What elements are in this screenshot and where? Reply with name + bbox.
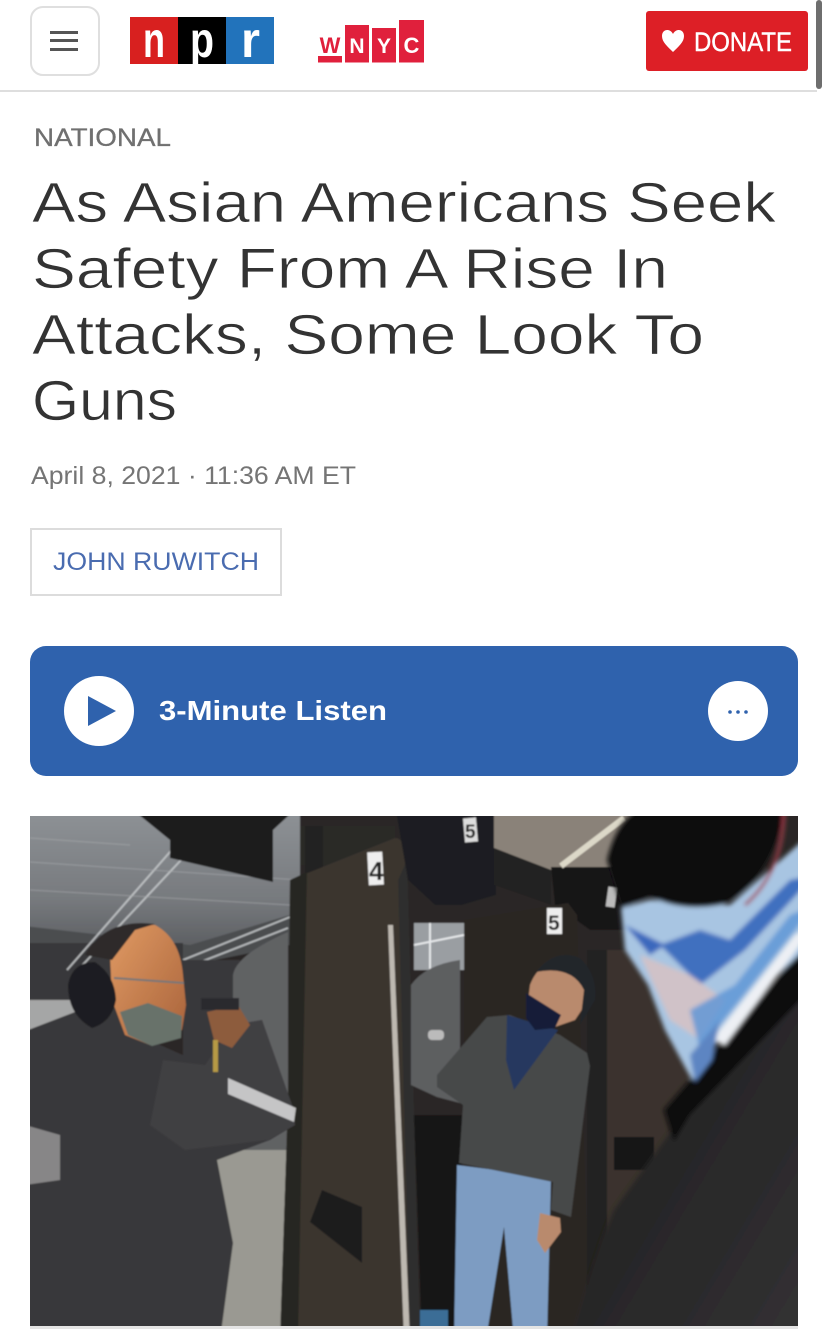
menu button bbox=[31, 7, 99, 75]
WNYC logo: W bbox=[320, 33, 341, 58]
ceiling right bbox=[492, 816, 635, 871]
donate button bbox=[646, 11, 808, 71]
WNYC logo bbox=[318, 20, 424, 62]
scrollbar bbox=[816, 0, 822, 89]
floor bbox=[215, 1150, 292, 1331]
icon: heart bbox=[662, 30, 684, 52]
headline: Safety From A Rise In bbox=[32, 237, 668, 301]
photo: shooting range bbox=[15, 800, 815, 1331]
ceiling bbox=[30, 816, 302, 946]
listen label: 3-Minute Listen bbox=[159, 695, 387, 726]
headline bbox=[32, 171, 777, 433]
headline: Guns bbox=[32, 369, 177, 433]
photo bottom edge bbox=[30, 1326, 798, 1329]
WNYC logo: C bbox=[404, 33, 420, 58]
middle panel bbox=[411, 960, 460, 1103]
WNYC logo: Y bbox=[377, 35, 391, 58]
back wall bbox=[182, 959, 240, 1064]
side wall panel bbox=[233, 932, 288, 1160]
audio player bbox=[30, 646, 798, 776]
foreground person bbox=[604, 816, 798, 1326]
section label: NATIONAL bbox=[34, 124, 171, 152]
headline: As Asian Americans Seek bbox=[32, 171, 777, 235]
byline button bbox=[31, 529, 281, 595]
photo: shooting range: 5 bbox=[465, 822, 476, 843]
date line: April 8, 2021 · 11:36 AM ET bbox=[31, 462, 356, 490]
donate button: DONATE bbox=[694, 27, 792, 57]
navigation bar bbox=[0, 0, 828, 92]
upper right screen bbox=[398, 816, 496, 904]
NPR logo: r bbox=[241, 12, 260, 68]
NPR logo bbox=[130, 12, 274, 68]
icon: play button bbox=[64, 676, 134, 746]
NPR logo: p bbox=[190, 12, 214, 68]
man standing bbox=[437, 955, 595, 1331]
booth 5 divider: 5 bbox=[548, 912, 560, 935]
booth 4 divider bbox=[280, 838, 420, 1331]
overhead monitor bbox=[140, 816, 289, 882]
booth 5 divider bbox=[546, 903, 690, 1274]
WNYC logo: N bbox=[349, 35, 365, 58]
NPR logo: n bbox=[143, 12, 165, 68]
byline button: JOHN RUWITCH bbox=[53, 548, 259, 576]
booth 4 divider: 4 bbox=[369, 856, 384, 886]
man shooting bbox=[15, 923, 296, 1331]
headline: Attacks, Some Look To bbox=[32, 303, 704, 367]
window background bbox=[414, 923, 464, 970]
icon: more options bbox=[708, 681, 768, 741]
